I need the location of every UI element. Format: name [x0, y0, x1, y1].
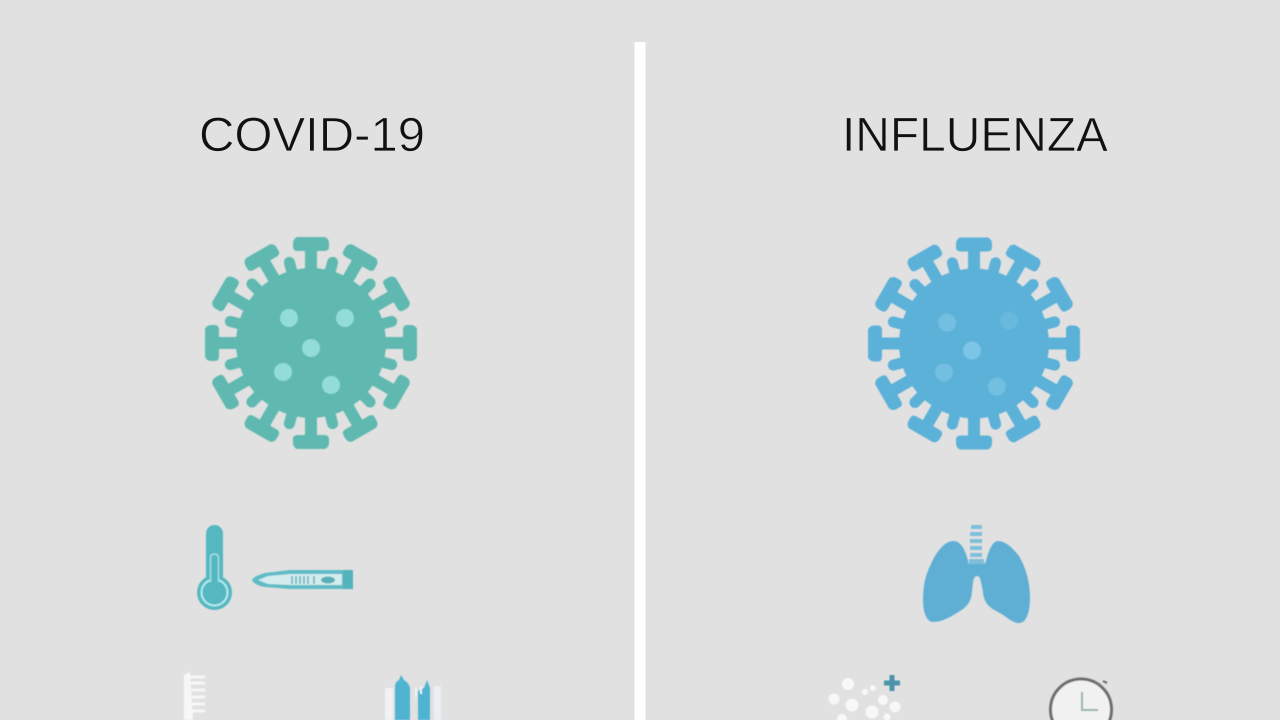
icon: COVID-19 virus	[205, 237, 417, 449]
title: INFLUENZA: INFLUENZA	[842, 109, 1108, 162]
icon: droplets and plus	[828, 675, 900, 720]
icon: thermometer	[197, 525, 232, 610]
title: COVID-19: COVID-19	[199, 109, 425, 162]
center divider	[634, 42, 646, 720]
icon: white brush	[184, 672, 205, 720]
icon: digital thermometer	[252, 570, 353, 589]
icon: lungs	[923, 525, 1030, 623]
icon: influenza virus	[868, 238, 1080, 450]
icon: test tubes	[385, 675, 441, 720]
icon: clock	[1050, 679, 1112, 720]
